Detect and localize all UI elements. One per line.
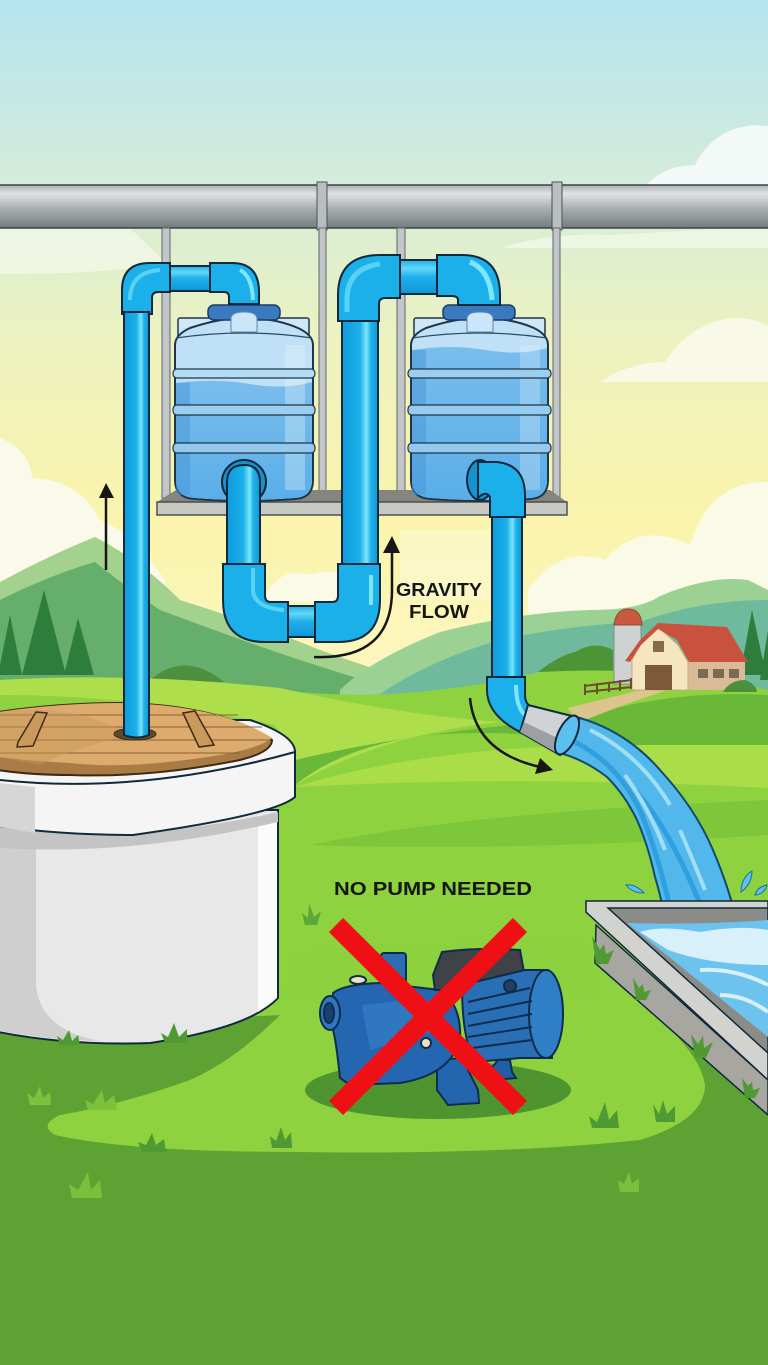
riser pipe (124, 312, 149, 738)
barn (625, 623, 748, 690)
hills (0, 537, 768, 696)
fence (584, 678, 632, 695)
clouds (0, 125, 768, 650)
arrow: up beside riser (99, 483, 114, 570)
pipe: riser from well to left tank (122, 263, 259, 314)
hanger rods (162, 228, 560, 498)
lower dark grass with light tongue (0, 962, 768, 1365)
ground (0, 670, 768, 1365)
well body (0, 810, 278, 1044)
arrow: outlet flow curve (470, 698, 553, 774)
field bands (0, 677, 768, 1000)
silo (614, 609, 642, 684)
dirt path (567, 690, 668, 722)
water trough (586, 871, 768, 1115)
grass tufts (27, 903, 760, 1198)
well rim (0, 720, 295, 835)
pump body (320, 949, 563, 1105)
farm: barn and silo (567, 609, 757, 722)
bush (723, 680, 757, 692)
top support rail (0, 182, 768, 230)
background: sky (0, 0, 768, 700)
pipe: siphon U between tanks (222, 255, 500, 642)
label: gravity flow: GRAVITY (396, 579, 483, 600)
label: no pump needed: NO PUMP NEEDED (334, 878, 532, 899)
arrow: gravity flow curve (314, 536, 400, 657)
red X (336, 925, 520, 1108)
pipe: outlet to trough (467, 460, 580, 755)
tank: right (408, 305, 551, 501)
water stream (550, 712, 738, 935)
label: gravity flow (396, 579, 483, 622)
trees (0, 590, 768, 682)
icon: crossed-out pump (305, 925, 571, 1119)
tank: left (173, 305, 315, 501)
wooden lid (0, 703, 272, 775)
shelf platform (157, 490, 567, 515)
well (0, 312, 295, 1044)
label: gravity flow: FLOW (409, 601, 470, 622)
